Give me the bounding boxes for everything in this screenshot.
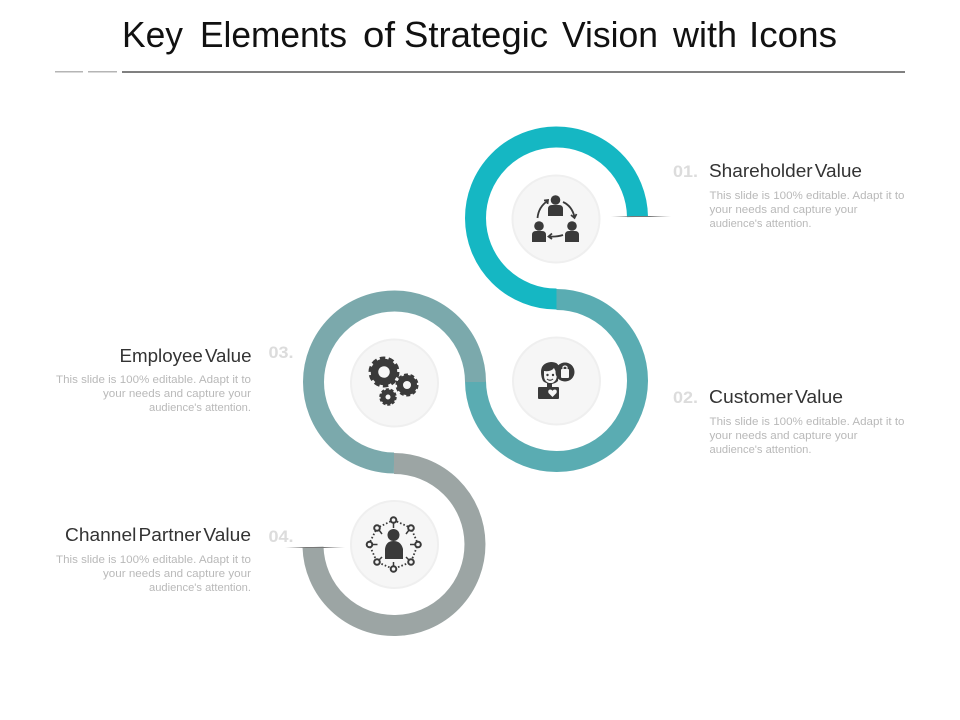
body: This slide is 100% editable. Adapt it to: [56, 374, 251, 386]
icon disc: employee: [351, 340, 438, 426]
body: your needs and capture your: [103, 568, 251, 580]
body: audience's attention.: [149, 582, 251, 594]
body: your needs and capture your: [710, 430, 858, 442]
text block 01: shareholder value: [673, 161, 904, 230]
icon: three people cycle: [532, 195, 579, 242]
number 01: 01.: [673, 162, 698, 181]
body: [56, 554, 251, 594]
heading: Shareholder Value: [709, 161, 862, 181]
ring 2: customer arc: [476, 300, 637, 461]
icon: customer with shopping bag: [538, 362, 574, 399]
ring 3: employee arc: [314, 301, 476, 463]
body: audience's attention.: [149, 402, 251, 414]
body: [710, 416, 904, 456]
body: This slide is 100% editable. Adapt it to: [56, 554, 251, 566]
body: audience's attention.: [710, 444, 812, 456]
title: with: [672, 14, 737, 55]
icon: person with network: [367, 517, 421, 572]
title: of: [363, 14, 396, 55]
text block 02: customer value: [673, 387, 904, 456]
heading: Customer Value: [709, 387, 843, 407]
number 03: 03.: [268, 343, 294, 362]
body: This slide is 100% editable. Adapt it to: [710, 416, 904, 428]
body: [56, 374, 251, 414]
body: your needs and capture your: [710, 204, 858, 216]
ring 1: shareholder arc: [476, 137, 638, 299]
title: Key: [122, 14, 183, 55]
ring end shadow 1: [611, 216, 671, 217]
icon disc: shareholder: [512, 176, 600, 262]
text block 04: channel partner value: [56, 525, 294, 594]
number 02: 02.: [673, 388, 698, 407]
body: This slide is 100% editable. Adapt it to: [710, 190, 904, 202]
icon: gears: [370, 358, 417, 404]
icon disc: channel partner: [351, 501, 438, 588]
title: Icons: [749, 14, 837, 55]
body: your needs and capture your: [103, 388, 251, 400]
title underline: [55, 71, 905, 73]
title: Strategic: [404, 14, 548, 55]
title: [122, 14, 837, 55]
ring 4: channel partner arc: [313, 464, 475, 626]
heading: Employee Value: [120, 346, 252, 366]
body: [710, 190, 904, 230]
heading: Channel Partner Value: [65, 525, 251, 545]
text block 03: employee value: [56, 343, 294, 414]
title: Vision: [562, 14, 658, 55]
icon disc: customer: [513, 338, 600, 424]
number 04: 04.: [268, 527, 294, 546]
body: audience's attention.: [710, 218, 812, 230]
ring end shadow 2: [285, 547, 345, 548]
title: Elements: [200, 14, 347, 55]
